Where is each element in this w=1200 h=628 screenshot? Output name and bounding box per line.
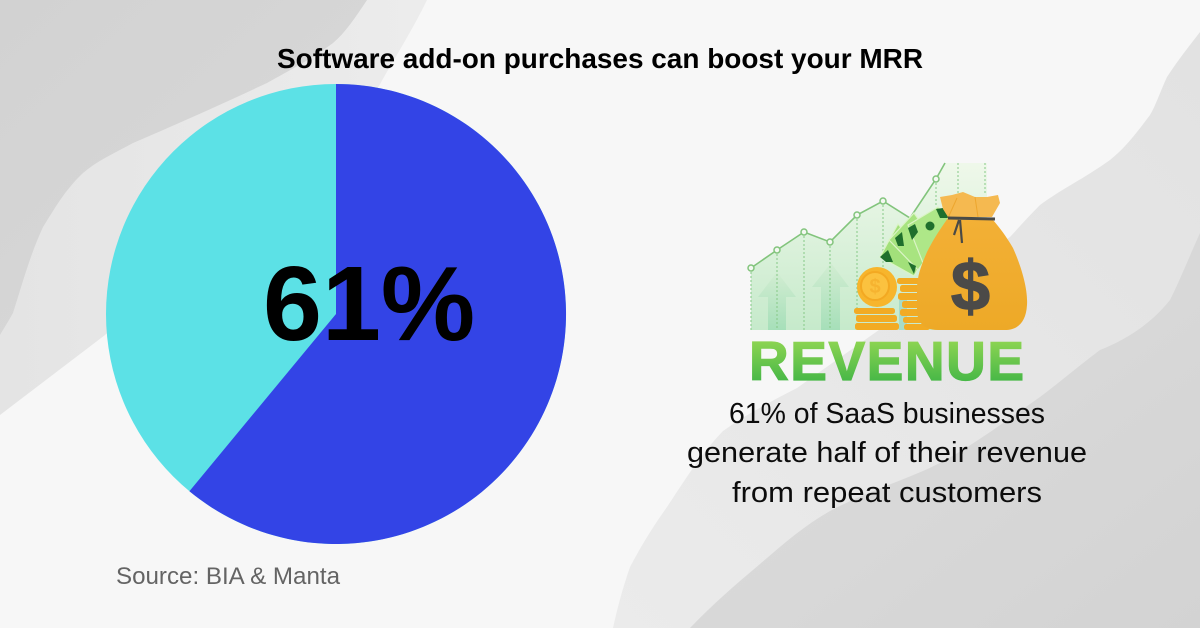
description text [687,398,1087,509]
gold coin [857,267,897,307]
revenue illustration [748,163,1027,330]
revenue wordmark: REVENUE [749,330,1024,392]
gold coin: $ [869,276,881,298]
trend line [751,163,945,268]
chart area [751,163,987,330]
pie slice: 61% [189,84,566,544]
description text: generate half of their revenue [687,437,1087,469]
money bag: $ [951,247,990,325]
growth arrows [758,263,849,330]
big percentage: 61% [263,245,475,363]
pie slice: remaining 39% [106,84,566,544]
description text: from repeat customers [732,477,1042,509]
money bag [917,192,1027,330]
coin stacks [854,278,930,330]
description text: 61% of SaaS businesses [729,398,1045,430]
dotted verticals [751,163,985,330]
pie chart [106,84,566,544]
banknotes [880,207,950,276]
source note: Source: BIA & Manta [116,563,341,590]
title: Software add-on purchases can boost your MRR [277,43,923,74]
